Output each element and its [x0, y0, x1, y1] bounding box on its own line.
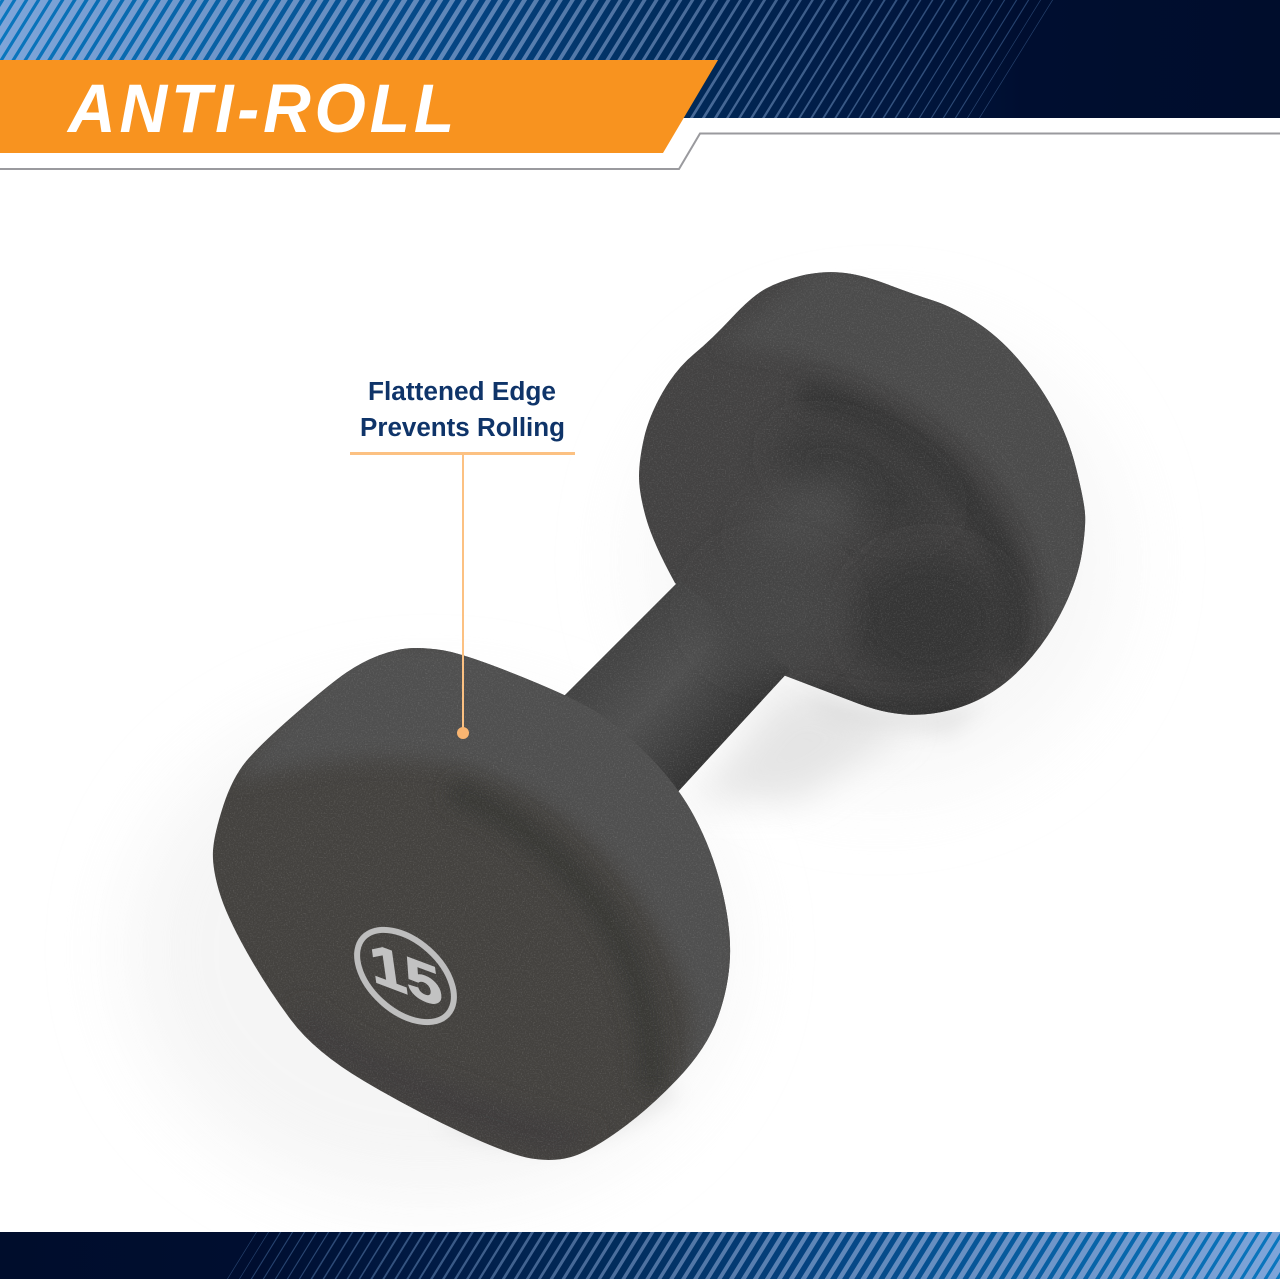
weight number: 15 — [366, 931, 446, 1020]
title: ANTI-ROLL — [66, 70, 458, 147]
back weight head and handle — [550, 260, 1100, 800]
top header band — [0, 0, 1280, 130]
header outline stroke — [0, 134, 1280, 169]
face crease shadow — [450, 790, 652, 1090]
inner crease shadow — [800, 395, 1016, 660]
handle body — [560, 580, 790, 795]
weight emblem: 15 — [340, 912, 471, 1040]
callout text — [360, 378, 565, 442]
floor shadow — [130, 330, 1120, 1200]
dumbbell — [205, 260, 1100, 1170]
callout: flattened edge — [350, 378, 575, 739]
title banner — [0, 60, 718, 153]
callout text: Flattened Edge — [368, 378, 556, 406]
bottom band — [0, 1232, 1280, 1279]
callout leader line — [350, 452, 575, 739]
flattened top face — [230, 640, 740, 1110]
neck flare — [785, 480, 853, 534]
outer rim highlight — [755, 272, 1086, 652]
lower face — [292, 1022, 575, 1160]
front weight head — [205, 640, 740, 1170]
callout text: Prevents Rolling — [360, 414, 565, 442]
